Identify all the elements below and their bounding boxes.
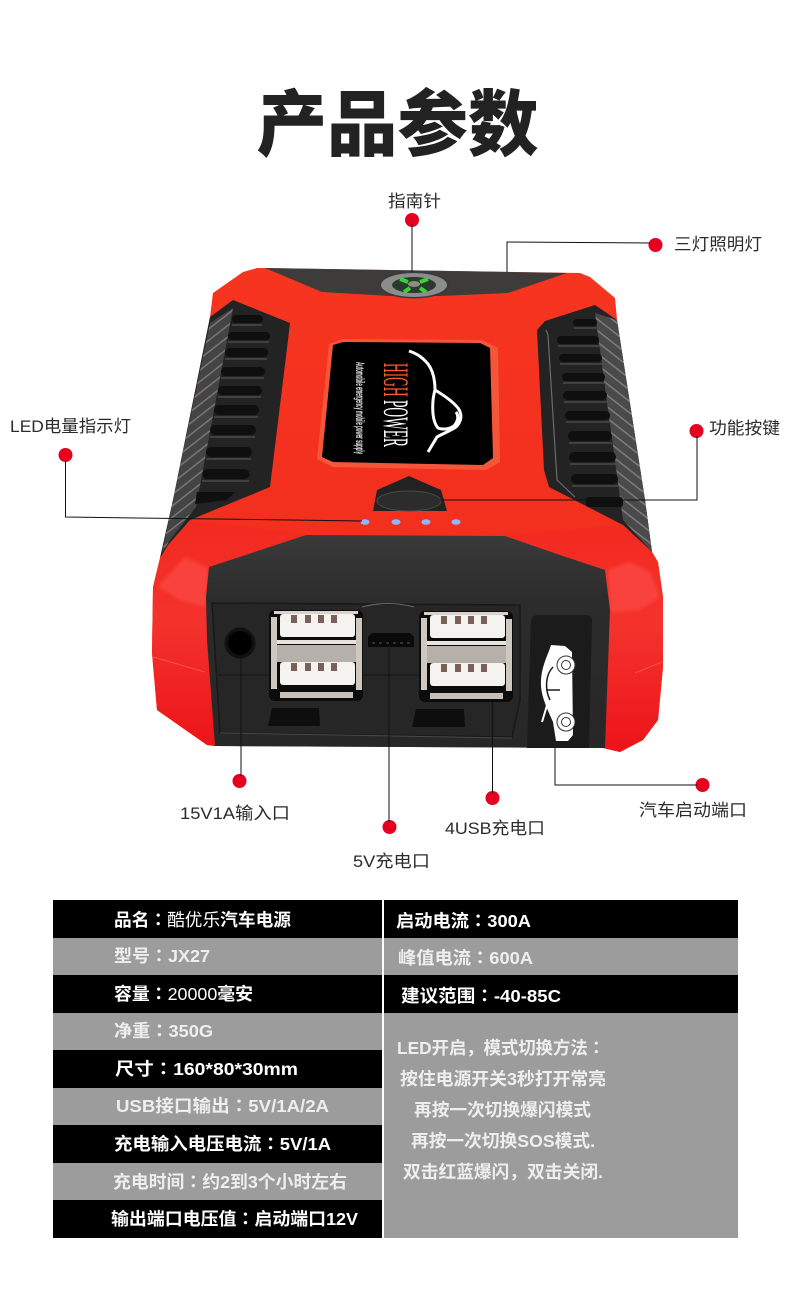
spec: recommended range: 建议范围：-40-85C — [401, 983, 561, 1008]
panel vents — [268, 708, 465, 727]
USB ports, left pair — [269, 610, 363, 701]
callout: 15V1A input — [180, 655, 290, 823]
device body: red top shell — [152, 268, 663, 752]
left rubber grip — [160, 300, 290, 558]
spec: USB output: USB接口输出 ：5V/1A/2A — [116, 1093, 329, 1118]
spec: output voltage: 输出端口电压值：启动端口12V — [111, 1206, 358, 1231]
LED mode instructions: LED开启，模式切换方法： — [397, 1035, 605, 1060]
top dark band — [265, 268, 567, 296]
spec: starting current: 启动电流：300A — [396, 908, 531, 933]
audio jack 15V input — [224, 628, 256, 658]
spec: charging time: 充电时间：约2到3个小时左右 — [113, 1169, 347, 1194]
callout: 4USB charging port — [445, 702, 545, 838]
logo plate frame — [317, 339, 500, 470]
port panel — [212, 603, 520, 738]
callout: 5V charging port: 5V充电口 — [353, 852, 430, 871]
callout: car start port: 汽车启动端口 — [639, 801, 747, 820]
callout: compass: 指南针 — [388, 192, 441, 211]
spec: dimensions: 尺寸：160*80*30mm — [115, 1056, 298, 1081]
title: 产品参数 — [256, 86, 538, 166]
product photo: jump starter power bank: Automobile emergency mobile power supply — [353, 362, 367, 454]
spec: charging input: 充电输入电压电流 ：5V/1A — [114, 1131, 331, 1156]
spec: capacity: 容量：20000毫安 — [114, 981, 253, 1006]
front right red corner — [505, 525, 663, 752]
LED indicators — [360, 519, 460, 525]
product photo: jump starter power bank: HIGH POWER — [376, 363, 416, 447]
callout: function button — [440, 419, 780, 500]
callout: three-LED light: 三灯照明灯 — [674, 235, 762, 254]
LED mode instructions: 再按一次切换爆闪模式 — [414, 1100, 592, 1120]
USB ports, right pair — [419, 611, 513, 702]
spec: product name: 品名：酷优乐汽车电源 — [114, 907, 292, 932]
specification table — [53, 900, 738, 1238]
callout: 4USB charging port: 4USB充电口 — [445, 819, 545, 838]
callout: function button: 功能按键 — [709, 419, 780, 438]
LED mode instructions: 双击红蓝爆闪，双击关闭. — [403, 1162, 603, 1182]
logo plate — [322, 342, 493, 465]
product photo: jump starter power bank — [152, 268, 663, 752]
callout: 15V1A input: 15V1A输入口 — [180, 804, 290, 823]
LED mode instructions: 再按一次切换SOS模式. — [411, 1131, 595, 1151]
right column row backgrounds — [384, 900, 738, 1238]
callout: LED battery indicator: LED电量指示灯 — [10, 417, 131, 436]
front left red corner — [152, 520, 306, 746]
compass — [378, 272, 450, 298]
front dark housing — [206, 535, 610, 748]
left column row backgrounds — [53, 900, 382, 1238]
right rubber grip — [537, 305, 652, 552]
callout: 5V charging port — [353, 648, 430, 871]
car logo — [409, 351, 461, 452]
LED mode instructions — [397, 1035, 606, 1182]
spec: model: 型号：JX27 — [114, 943, 210, 968]
callout: LED battery indicator — [10, 417, 362, 521]
micro USB port — [368, 633, 414, 647]
car start port — [527, 615, 592, 748]
callout: compass — [388, 192, 441, 272]
LED mode instructions: 按住电源开关3秒打开常亮 — [400, 1069, 606, 1089]
spec: peak current: 峰值电流：600A — [398, 945, 533, 970]
callout: car start port — [555, 748, 747, 820]
power button — [373, 476, 447, 511]
spec: net weight: 净重：350G — [114, 1018, 213, 1043]
callout: three-LED light — [507, 235, 762, 272]
